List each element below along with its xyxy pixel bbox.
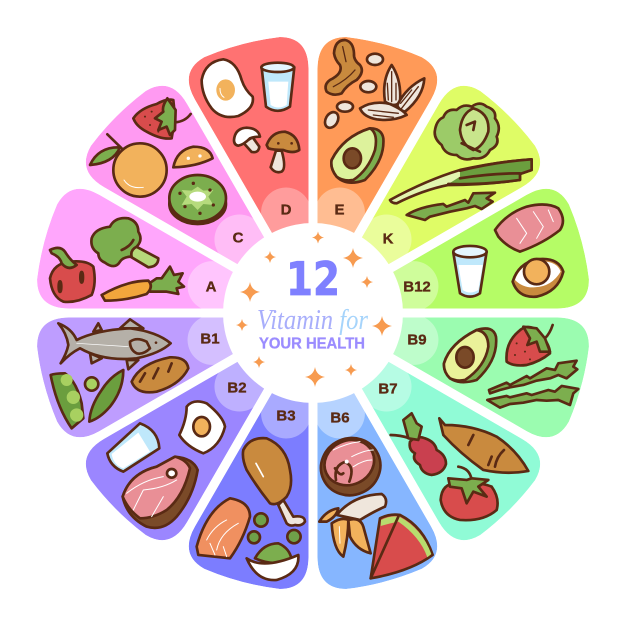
icon: glass of milk: [261, 63, 294, 111]
panel: vitamin A: [37, 188, 233, 308]
label D: D: [281, 202, 292, 218]
icon: lettuce: [435, 104, 499, 159]
wedge B2: [86, 362, 264, 540]
icon: peas: [248, 513, 301, 543]
icon: leek: [390, 159, 532, 203]
icon: red berry: [391, 413, 446, 475]
icon: white mushroom: [234, 128, 260, 152]
panel: central title circle: [223, 223, 403, 403]
wedge B1: [37, 318, 233, 438]
icon: brown mushroom: [267, 132, 299, 172]
label B9: B9: [407, 332, 427, 348]
decorative orange sparkles: [236, 232, 392, 387]
label B3: B3: [276, 408, 296, 424]
panel: vitamin E: [318, 37, 438, 233]
icon: salmon fillet: [495, 205, 563, 252]
label B2: B2: [227, 380, 247, 396]
label B6: B6: [330, 410, 350, 426]
icon: kiwi: [169, 175, 226, 224]
wedge D: [188, 37, 308, 233]
wedge B7: [362, 362, 540, 540]
icon: fried egg: [179, 401, 225, 453]
icon: tipped glass of milk: [107, 423, 159, 472]
wedge E: [318, 37, 438, 233]
panel: vitamin C: [86, 86, 264, 264]
panel: vitamin K: [362, 86, 540, 264]
icon: salmon steak: [312, 428, 390, 505]
wedge B9: [393, 318, 589, 438]
icon: broccoli: [91, 218, 158, 267]
infographic: 12 vitamin wheel: [37, 37, 589, 589]
icon: orange slice: [173, 147, 213, 167]
icon: sunflower seeds: [360, 65, 424, 120]
icon: tomato: [441, 467, 498, 520]
label B12: B12: [403, 278, 431, 296]
heading: 12: 12: [286, 252, 340, 306]
panel: vitamin B2: [86, 362, 264, 540]
icon: sweet potato: [439, 418, 528, 473]
icon: avocado: [444, 328, 496, 382]
wedge B6: [318, 393, 438, 589]
icon: strawberry: [133, 98, 191, 139]
label E: E: [334, 202, 345, 218]
panel: vitamin B12: [393, 188, 589, 308]
icon: bread: [132, 357, 188, 392]
icon: banana: [319, 494, 386, 557]
icon: glass of milk: [453, 246, 487, 297]
wedge K: [362, 86, 540, 264]
icon: bowl of peas: [247, 543, 298, 580]
wedge A: [37, 188, 233, 308]
panel: vitamin D: [188, 37, 308, 233]
icon: pea pods: [51, 370, 123, 428]
icon: salmon fillet: [197, 498, 250, 558]
label C: C: [233, 230, 244, 246]
panel: vitamin B9: [393, 318, 589, 438]
icon: boiled egg: [513, 259, 563, 297]
icon: fried egg: [202, 59, 253, 117]
icon: carrot: [102, 267, 184, 301]
icon: asparagus: [407, 193, 495, 220]
label A: A: [206, 278, 217, 296]
icon: fish: [58, 319, 171, 369]
icon: watermelon: [371, 515, 433, 578]
panel: vitamin B6: [318, 393, 438, 589]
panel: vitamin B1: [37, 318, 233, 438]
icon: orange: [90, 134, 167, 197]
label B1: B1: [200, 330, 220, 348]
panel: vitamin B7: [362, 362, 540, 540]
icon: strawberry: [506, 325, 553, 365]
wedge B12: [393, 188, 589, 308]
icon: red pepper: [50, 248, 95, 302]
icon: chicken drumstick: [243, 438, 305, 526]
icon: small nuts: [322, 54, 383, 130]
icon: peanut: [326, 40, 362, 95]
subtitle: YOUR HEALTH: YOUR HEALTH: [259, 336, 365, 352]
wedge C: [86, 86, 264, 264]
icon: asparagus: [487, 361, 578, 408]
subtitle: Vitamin for: Vitamin for: [257, 305, 368, 336]
label B7: B7: [378, 380, 398, 398]
label K: K: [383, 230, 394, 248]
wedge B3: [188, 393, 308, 589]
icon: avocado: [331, 128, 383, 183]
icon: steak: [123, 457, 198, 528]
panel: vitamin B3: [188, 393, 308, 589]
